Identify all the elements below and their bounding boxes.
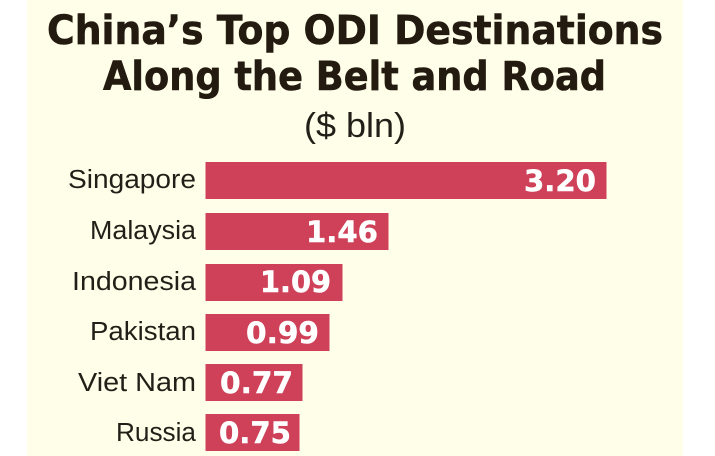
row: Singapore: Singapore [68, 166, 196, 194]
row: Singapore [68, 162, 606, 199]
row: Viet Nam [78, 364, 302, 401]
row: Pakistan: 0.99 [246, 316, 319, 350]
title [47, 8, 663, 100]
row: Malaysia [90, 213, 388, 250]
unit subtitle: ($ bln) [304, 107, 406, 145]
row: Pakistan: Pakistan [90, 318, 196, 346]
title: Along the Belt and Road [103, 54, 606, 100]
row: Viet Nam: Viet Nam [78, 369, 196, 397]
row: Indonesia: Indonesia [72, 268, 197, 296]
row: Singapore: 3.20 [524, 164, 596, 198]
row: Indonesia [72, 264, 342, 301]
row: Viet Nam: 0.77 [220, 366, 293, 400]
bar chart [68, 162, 606, 451]
row: Russia [116, 414, 300, 451]
title: China’s Top ODI Destinations [47, 8, 663, 54]
row: Malaysia: Malaysia [90, 217, 197, 245]
row: Russia: 0.75 [219, 416, 291, 450]
row: Russia: Russia [116, 419, 197, 447]
row: Pakistan [90, 314, 330, 351]
row: Indonesia: 1.09 [260, 265, 331, 299]
row: Malaysia: 1.46 [306, 215, 378, 249]
